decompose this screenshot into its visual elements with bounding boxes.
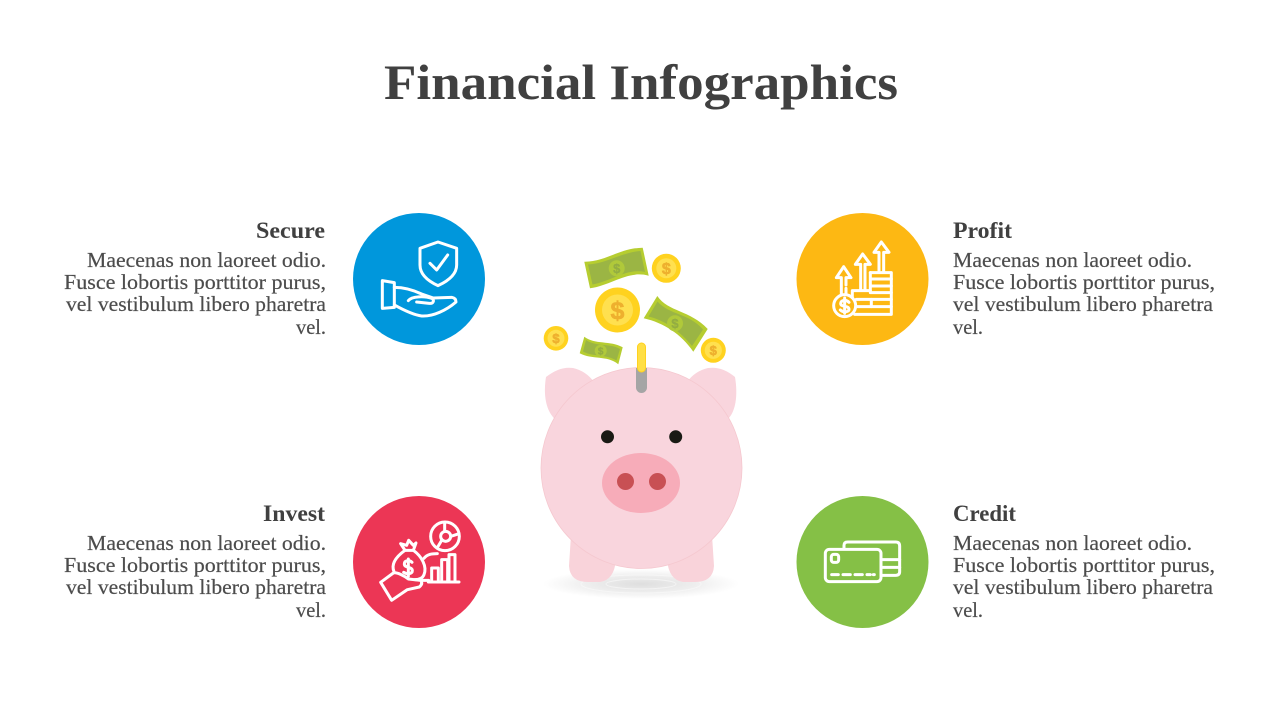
- coin: bottom right: [701, 338, 726, 363]
- bill: top: [584, 248, 649, 288]
- coin: bottom right: $: [710, 343, 718, 358]
- text block: secure: vel vestibulum libero pharetra: [66, 292, 326, 316]
- text block: profit: [953, 248, 1215, 339]
- icon: green circle with credit cards: [796, 496, 928, 628]
- illustration: piggy bank with falling money: [541, 248, 742, 599]
- text block: credit: Fusce lobortis porttitor purus,: [953, 553, 1215, 577]
- heading: credit: Credit: [953, 501, 1016, 526]
- text block: invest: Maecenas non laoreet odio.: [87, 531, 326, 555]
- heading: secure: Secure: [256, 218, 325, 243]
- pig legs: [569, 535, 714, 582]
- panel: credit: [796, 496, 1215, 628]
- text block: invest: Fusce lobortis porttitor purus,: [64, 553, 326, 577]
- bill: small: [580, 337, 623, 364]
- icon: red circle with money bag and charts: [353, 496, 485, 628]
- text block: credit: [953, 531, 1215, 622]
- icon: blue circle with hand and shield: [353, 213, 485, 345]
- text block: credit: vel vestibulum libero pharetra: [953, 575, 1213, 599]
- text block: secure: vel.: [296, 315, 326, 339]
- text block: credit: vel.: [953, 598, 983, 622]
- panel: profit: [796, 213, 1215, 345]
- text block: secure: Fusce lobortis porttitor purus,: [64, 270, 326, 294]
- text block: secure: [64, 248, 326, 339]
- coin: left: [544, 326, 568, 351]
- coin: large: $: [611, 297, 625, 325]
- bill: top: $: [613, 261, 621, 276]
- text block: profit: Maecenas non laoreet odio.: [953, 248, 1192, 272]
- coin slot: [636, 368, 647, 393]
- pig body: [541, 368, 742, 568]
- falling coin in slot: [638, 343, 646, 372]
- heading: profit: Profit: [953, 218, 1012, 243]
- pig ears: [545, 368, 736, 430]
- coin: top right: [652, 254, 681, 283]
- text block: profit: vel.: [953, 315, 983, 339]
- bill: right: [644, 296, 708, 352]
- bill: right: $: [671, 316, 679, 331]
- text block: invest: vel.: [296, 598, 326, 622]
- coin: left: $: [552, 331, 560, 346]
- coin: top right: $: [662, 261, 671, 278]
- bill: small: $: [598, 346, 604, 358]
- pig eyes: [601, 430, 682, 443]
- text block: credit: Maecenas non laoreet odio.: [953, 531, 1192, 555]
- panel: invest: [64, 496, 485, 628]
- icon: yellow circle with coins and arrows: [796, 213, 928, 345]
- pig snout: [602, 453, 680, 513]
- title: Financial Infographics: [384, 54, 898, 110]
- coin: large: [595, 288, 640, 332]
- panel: secure: [64, 213, 485, 345]
- text block: invest: [64, 531, 326, 622]
- heading: invest: Invest: [263, 501, 325, 526]
- shadow: [543, 569, 739, 599]
- text block: invest: vel vestibulum libero pharetra: [66, 575, 326, 599]
- text block: profit: vel vestibulum libero pharetra: [953, 292, 1213, 316]
- text block: profit: Fusce lobortis porttitor purus,: [953, 270, 1215, 294]
- text block: secure: Maecenas non laoreet odio.: [87, 248, 326, 272]
